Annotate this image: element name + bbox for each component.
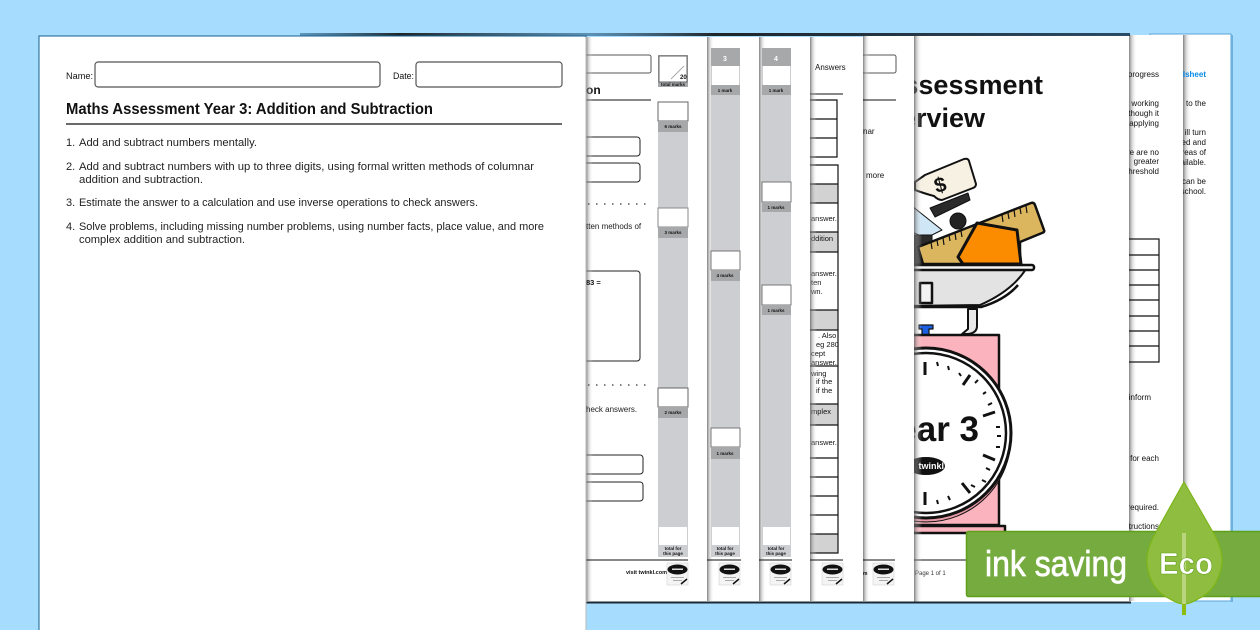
- name and date fields: [66, 62, 562, 87]
- page 2: first question sheet: tten methods of: [586, 222, 642, 231]
- icon: eco leaf: [1147, 482, 1222, 615]
- page 8: assessment notes and table: threshold: [1126, 167, 1159, 176]
- marks column: total marks: [661, 82, 685, 87]
- marks column: [711, 48, 740, 557]
- learning objectives list: complex addition and subtraction.: [79, 234, 245, 246]
- answers table: ten: [811, 278, 821, 287]
- marks column: [658, 55, 688, 557]
- page 8: assessment notes and table: [1100, 35, 1183, 602]
- answers table: mplex: [811, 407, 831, 416]
- page 6: objectives sheet edge: more: [866, 171, 885, 180]
- page 9: teacher notes, far right: dsheet: [1180, 70, 1206, 79]
- cover year label: Year 3: [876, 410, 979, 449]
- answers table: answer.: [811, 214, 837, 223]
- table on page 8: [1120, 239, 1159, 362]
- answers table: answer.: [811, 438, 837, 447]
- marks column: 20: [680, 75, 687, 81]
- page 8: assessment notes and table: applying: [1129, 119, 1159, 128]
- page 8: assessment notes and table: for each: [1130, 454, 1159, 463]
- icon: shirt: [914, 207, 942, 236]
- eco banner: ink saving: [966, 482, 1260, 615]
- page 7: cover page: [914, 35, 1129, 602]
- answers table: cept: [811, 349, 826, 358]
- learning objectives list: 2.: [66, 161, 75, 173]
- page 2: first question sheet: heck answers.: [586, 405, 637, 414]
- twinkl badge: twinkl: [918, 461, 944, 471]
- page 9: teacher notes, far right: can be: [1182, 177, 1207, 186]
- icon: price tag: $: [932, 173, 949, 198]
- page edge shadows: [300, 33, 1131, 604]
- icon: price tag: [915, 159, 976, 200]
- page 4: question sheet edge: [759, 37, 810, 602]
- page 6: objectives sheet edge: nar: [863, 127, 875, 136]
- page 8: assessment notes and table: re are no: [1127, 148, 1160, 157]
- eco banner: ink saving: ink saving: [985, 543, 1127, 584]
- page 9: teacher notes, far right: [1150, 34, 1233, 602]
- marks column: 1 mark: [769, 88, 784, 93]
- page 8: assessment notes and table: inform: [1129, 393, 1151, 402]
- page 5: answers sheet: Answers: [815, 63, 846, 72]
- page 6: objectives sheet edge: [850, 36, 914, 602]
- learning objectives list: Add and subtract numbers mentally.: [79, 137, 257, 149]
- icon: pink scale body: [914, 334, 1000, 525]
- page 2: first question sheet: [560, 37, 707, 602]
- icon: ruler: [918, 203, 1044, 264]
- icon: eco leaf: Eco: [1159, 546, 1213, 581]
- marks column: this page: [715, 551, 735, 556]
- marks column: total for: [717, 546, 734, 551]
- marks column: 1 marks: [767, 205, 785, 210]
- page 8: assessment notes and table: though it: [1128, 109, 1160, 118]
- page 9: teacher notes, far right: ailable.: [1181, 158, 1206, 167]
- answers table: if the: [816, 377, 832, 386]
- icon: scale stem: [962, 309, 977, 334]
- page 9: teacher notes, far right: reas of: [1182, 148, 1207, 157]
- answers table: answer.: [811, 269, 837, 278]
- learning objectives list: addition and subtraction.: [79, 174, 203, 186]
- page 8: assessment notes and table: working: [1130, 99, 1159, 108]
- marks column: 3 marks: [664, 230, 682, 235]
- cover title: Overview: [865, 103, 986, 133]
- marks column: this page: [663, 551, 683, 556]
- sheet title: Maths Assessment Year 3: Addition and Subtraction: [66, 101, 433, 118]
- cover title: Assessment: [884, 70, 1043, 100]
- icon: scale clock dial: [914, 346, 1012, 520]
- learning objectives list: Solve problems, including missing number problems, using number facts, place value, and more: [79, 221, 544, 233]
- page 1: objectives sheet: [39, 36, 586, 630]
- answers table: eg 280: [816, 340, 839, 349]
- page 9: teacher notes, far right: to the: [1186, 99, 1207, 108]
- page 8: assessment notes and table: required.: [1127, 503, 1159, 512]
- page 8: assessment notes and table: progress: [1128, 70, 1159, 79]
- name and date fields: Name:: [66, 71, 93, 81]
- learning objectives list: 1.: [66, 137, 75, 149]
- page 2: first question sheet: visit twinkl.com: [626, 570, 667, 576]
- answers table: . Also: [818, 331, 836, 340]
- marks column: 1 marks: [767, 308, 785, 313]
- marks column: total for: [768, 546, 785, 551]
- marks column: 4: [774, 56, 778, 63]
- page 9: teacher notes, far right: ed and: [1182, 138, 1206, 147]
- marks column: 6 marks: [664, 124, 682, 129]
- icon: black bar: [930, 193, 970, 217]
- icon: orange shape: [958, 223, 1021, 264]
- page 8: assessment notes and table: tructions: [1129, 522, 1159, 531]
- page 6: objectives sheet edge: m: [863, 571, 868, 577]
- page 9: teacher notes, far right: school.: [1181, 187, 1206, 196]
- name and date fields: Date:: [393, 71, 414, 81]
- answers table: answer.: [811, 358, 837, 367]
- marks column: [762, 48, 791, 557]
- learning objectives list: [66, 137, 544, 246]
- page 2: first question sheet: 83 =: [586, 278, 601, 287]
- learning objectives list: Add and subtract numbers with up to three digits, using formal written methods of columnar: [79, 161, 534, 173]
- answers table: wing: [810, 369, 826, 378]
- icon: blue knob: [919, 325, 933, 335]
- marks column: 1 marks: [716, 451, 734, 456]
- learning objectives list: 4.: [66, 221, 75, 233]
- learning objectives list: Estimate the answer to a calculation and use inverse operations to check answers.: [79, 197, 478, 209]
- cover title: [914, 76, 1043, 128]
- answers table: if the: [816, 386, 832, 395]
- page 8: assessment notes and table: greater: [1134, 157, 1159, 166]
- answers table: ddition: [811, 234, 833, 243]
- page 2: first question sheet: on: [586, 83, 601, 97]
- cover footer: Page 1 of 1: [915, 571, 946, 577]
- marks column: 3: [723, 56, 727, 63]
- answers table: wn.: [810, 287, 823, 296]
- page 9: teacher notes, far right: ill turn: [1185, 128, 1206, 137]
- marks column: total for: [665, 546, 682, 551]
- icon: scale loaded with price tag, ruler and shapes: [914, 158, 1046, 534]
- marks column: this page: [766, 551, 786, 556]
- icon: scale bowl: [914, 271, 1026, 306]
- answer boxes: [560, 137, 643, 501]
- page 3: question sheet edge: [707, 37, 759, 602]
- twinkl badge: [914, 457, 945, 475]
- marks column: 1 mark: [718, 88, 733, 93]
- page 5: answers sheet: [810, 37, 863, 602]
- marks column: 2 marks: [664, 410, 682, 415]
- answers table: [810, 100, 839, 553]
- marks column: 4 marks: [716, 273, 734, 278]
- learning objectives list: 3.: [66, 197, 75, 209]
